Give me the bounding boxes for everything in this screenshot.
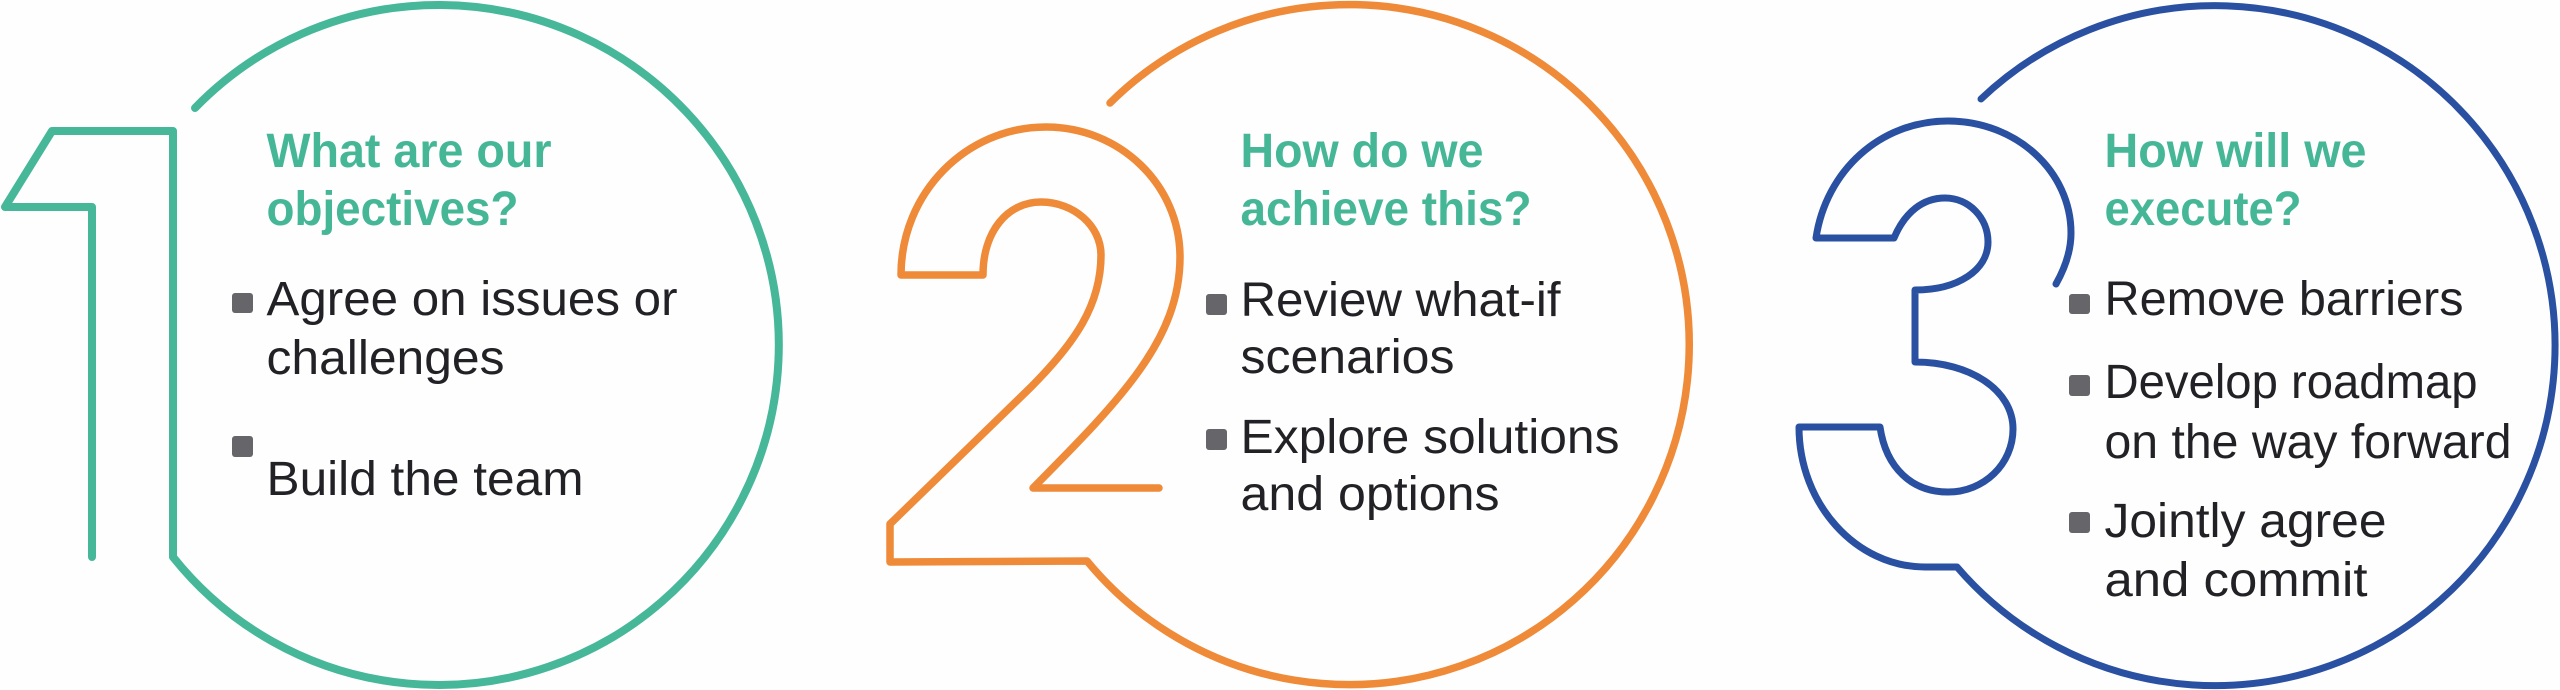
heading: how do we achieve this: How do we <box>1240 125 1484 178</box>
numeral 2 with circle outline <box>890 5 1689 685</box>
bullet item: build the team: Build the team <box>266 453 584 506</box>
bullet item: agree on issues: Agree on issues or <box>266 273 678 326</box>
panel: step 1 objectives <box>5 5 779 685</box>
bullet item: build the team <box>232 436 584 506</box>
heading: how do we achieve this: achieve this? <box>1240 183 1532 236</box>
bullet item: develop roadmap: Develop roadmap <box>2104 356 2478 409</box>
panel: step 2 approach <box>890 5 1689 685</box>
heading: how will we execute: execute? <box>2104 183 2302 236</box>
heading: how will we execute <box>2104 125 2366 236</box>
bullet item: agree on issues <box>232 273 678 385</box>
panel: step 3 execution <box>1799 6 2555 686</box>
bullet item: review what-if scenarios: Review what-if <box>1240 274 1561 327</box>
bullet item: remove barriers: Remove barriers <box>2104 273 2464 326</box>
numeral 3 with circle outline <box>1799 6 2555 686</box>
bullet item: develop roadmap: on the way forward <box>2104 416 2512 469</box>
numeral 1 with circle outline <box>5 5 779 685</box>
bullet item: review what-if scenarios <box>1206 274 1561 384</box>
heading: what are our objectives: What are our <box>266 125 552 178</box>
bullet item: develop roadmap <box>2069 356 2512 469</box>
heading: what are our objectives: objectives? <box>266 183 518 236</box>
bullet item: explore solutions: and options <box>1240 468 1500 521</box>
bullet item: review what-if scenarios: scenarios <box>1240 331 1454 384</box>
bullet item: agree on issues: challenges <box>266 332 504 385</box>
bullet item: explore solutions: Explore solutions <box>1240 411 1620 464</box>
heading: what are our objectives <box>266 125 552 236</box>
bullet item: jointly agree and commit: and commit <box>2104 554 2368 607</box>
bullet item: jointly agree and commit: Jointly agree <box>2104 495 2386 548</box>
heading: how will we execute: How will we <box>2104 125 2366 178</box>
heading: how do we achieve this <box>1240 125 1532 236</box>
bullet item: explore solutions <box>1206 411 1620 521</box>
bullet item: jointly agree and commit <box>2069 495 2386 607</box>
